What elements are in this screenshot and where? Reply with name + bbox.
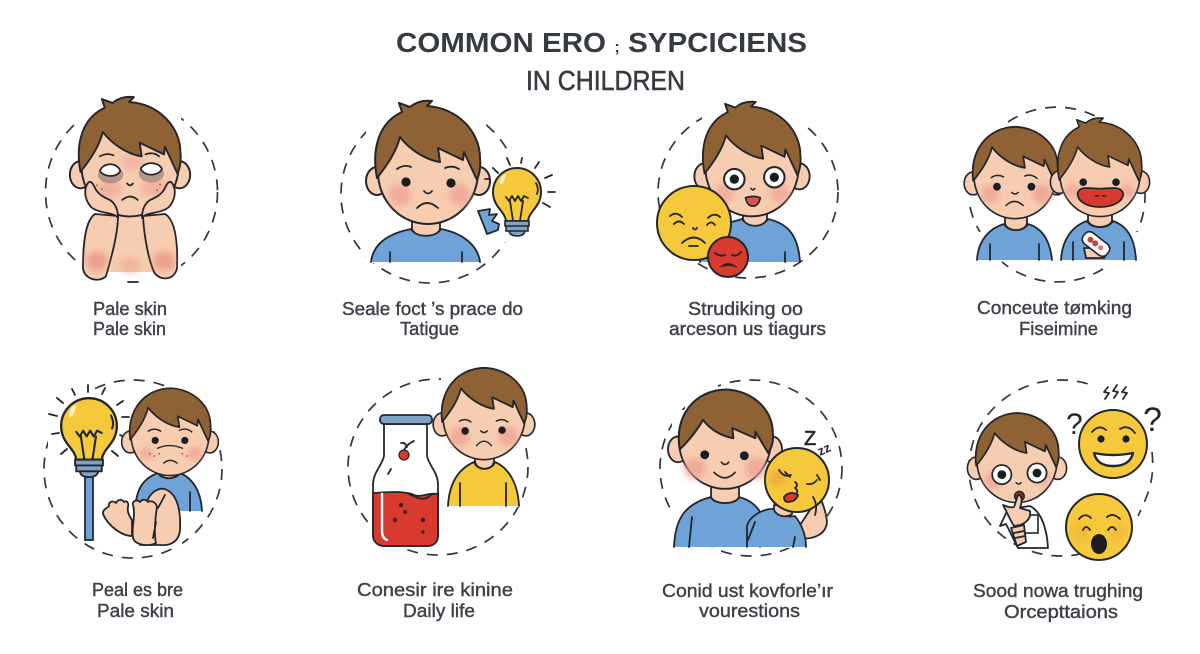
caption: Daily life	[403, 601, 475, 621]
icon: surprised boy in white coat	[967, 413, 1067, 548]
panel: boy with sleepy emoji	[660, 378, 842, 621]
caption: Pale skin	[93, 299, 167, 319]
caption	[357, 580, 513, 621]
icon: sleep letters: Z	[804, 428, 816, 450]
caption	[662, 581, 833, 621]
icon: sleep letters	[804, 428, 834, 459]
caption: Strudiking oo	[688, 299, 803, 319]
icon: bottle with red liquid	[373, 415, 438, 546]
caption: Pale skin	[93, 319, 166, 339]
icon: question marks	[1066, 401, 1162, 441]
icon: stress marks	[1104, 385, 1127, 399]
panel: pale skin, boy with head on hands	[46, 92, 218, 339]
icon: smiling boy	[668, 389, 782, 547]
caption: Tatigue	[400, 319, 459, 339]
icon: sleepy emoji with shoulder and hand	[747, 448, 829, 547]
title: IN CHILDREN	[526, 65, 685, 96]
icon: sad yellow emoji	[657, 186, 731, 260]
icon: sad boy	[366, 101, 490, 262]
caption: Orcepttaions	[1004, 602, 1118, 622]
caption: Seale foct ’s prace do	[342, 299, 523, 319]
caption: Sood nowa trughing	[973, 581, 1143, 601]
caption: vourestions	[699, 601, 800, 621]
icon: sad boy in yellow shirt	[433, 368, 535, 506]
icon: sad boy left	[964, 127, 1066, 260]
caption: Fiseimine	[1019, 319, 1098, 339]
icon: blue arrow	[478, 209, 499, 234]
icon: wide-eyed boy	[694, 102, 810, 262]
caption: Conid ust kovforle’ır	[662, 581, 833, 601]
panel: daily life, bottle and boy	[348, 366, 535, 621]
icon: shocked emoji	[1066, 494, 1132, 560]
icon: boy hugging knees	[103, 388, 218, 545]
panel: pale skin, bulb and boy hugging knees	[44, 380, 222, 621]
caption: arceson us tiagurs	[669, 319, 826, 339]
caption	[977, 298, 1132, 339]
caption	[342, 299, 523, 339]
icon: question marks: ?	[1066, 408, 1083, 441]
panel: boy with emoji faces	[657, 100, 838, 339]
icon: light bulb	[485, 158, 555, 236]
caption: Conceute tømking	[977, 298, 1132, 318]
title	[396, 27, 807, 96]
caption	[93, 299, 167, 339]
icon: bulb on stick	[49, 385, 129, 540]
icon: question marks: ?	[1143, 401, 1162, 439]
panel: fatigue, boy with light bulb	[341, 100, 557, 339]
caption: Peal es bre	[92, 580, 183, 600]
icon: boy with open red mouth	[1050, 118, 1150, 260]
panel: boy with question marks and emojis	[967, 375, 1162, 622]
title: COMMON ERO ; SYPCICIENS	[396, 27, 807, 58]
icon: happy emoji	[1079, 410, 1147, 478]
caption	[92, 580, 183, 621]
caption	[669, 299, 826, 339]
caption: Conesir ire kinine	[357, 580, 513, 600]
icon: sleep letters: zz	[815, 439, 834, 459]
icon: boy resting chin on hands	[70, 97, 190, 280]
caption: Pale skin	[97, 601, 174, 621]
caption	[973, 581, 1143, 622]
icon: angry red emoji	[708, 237, 748, 277]
panel: two boys with test strip	[964, 107, 1150, 339]
